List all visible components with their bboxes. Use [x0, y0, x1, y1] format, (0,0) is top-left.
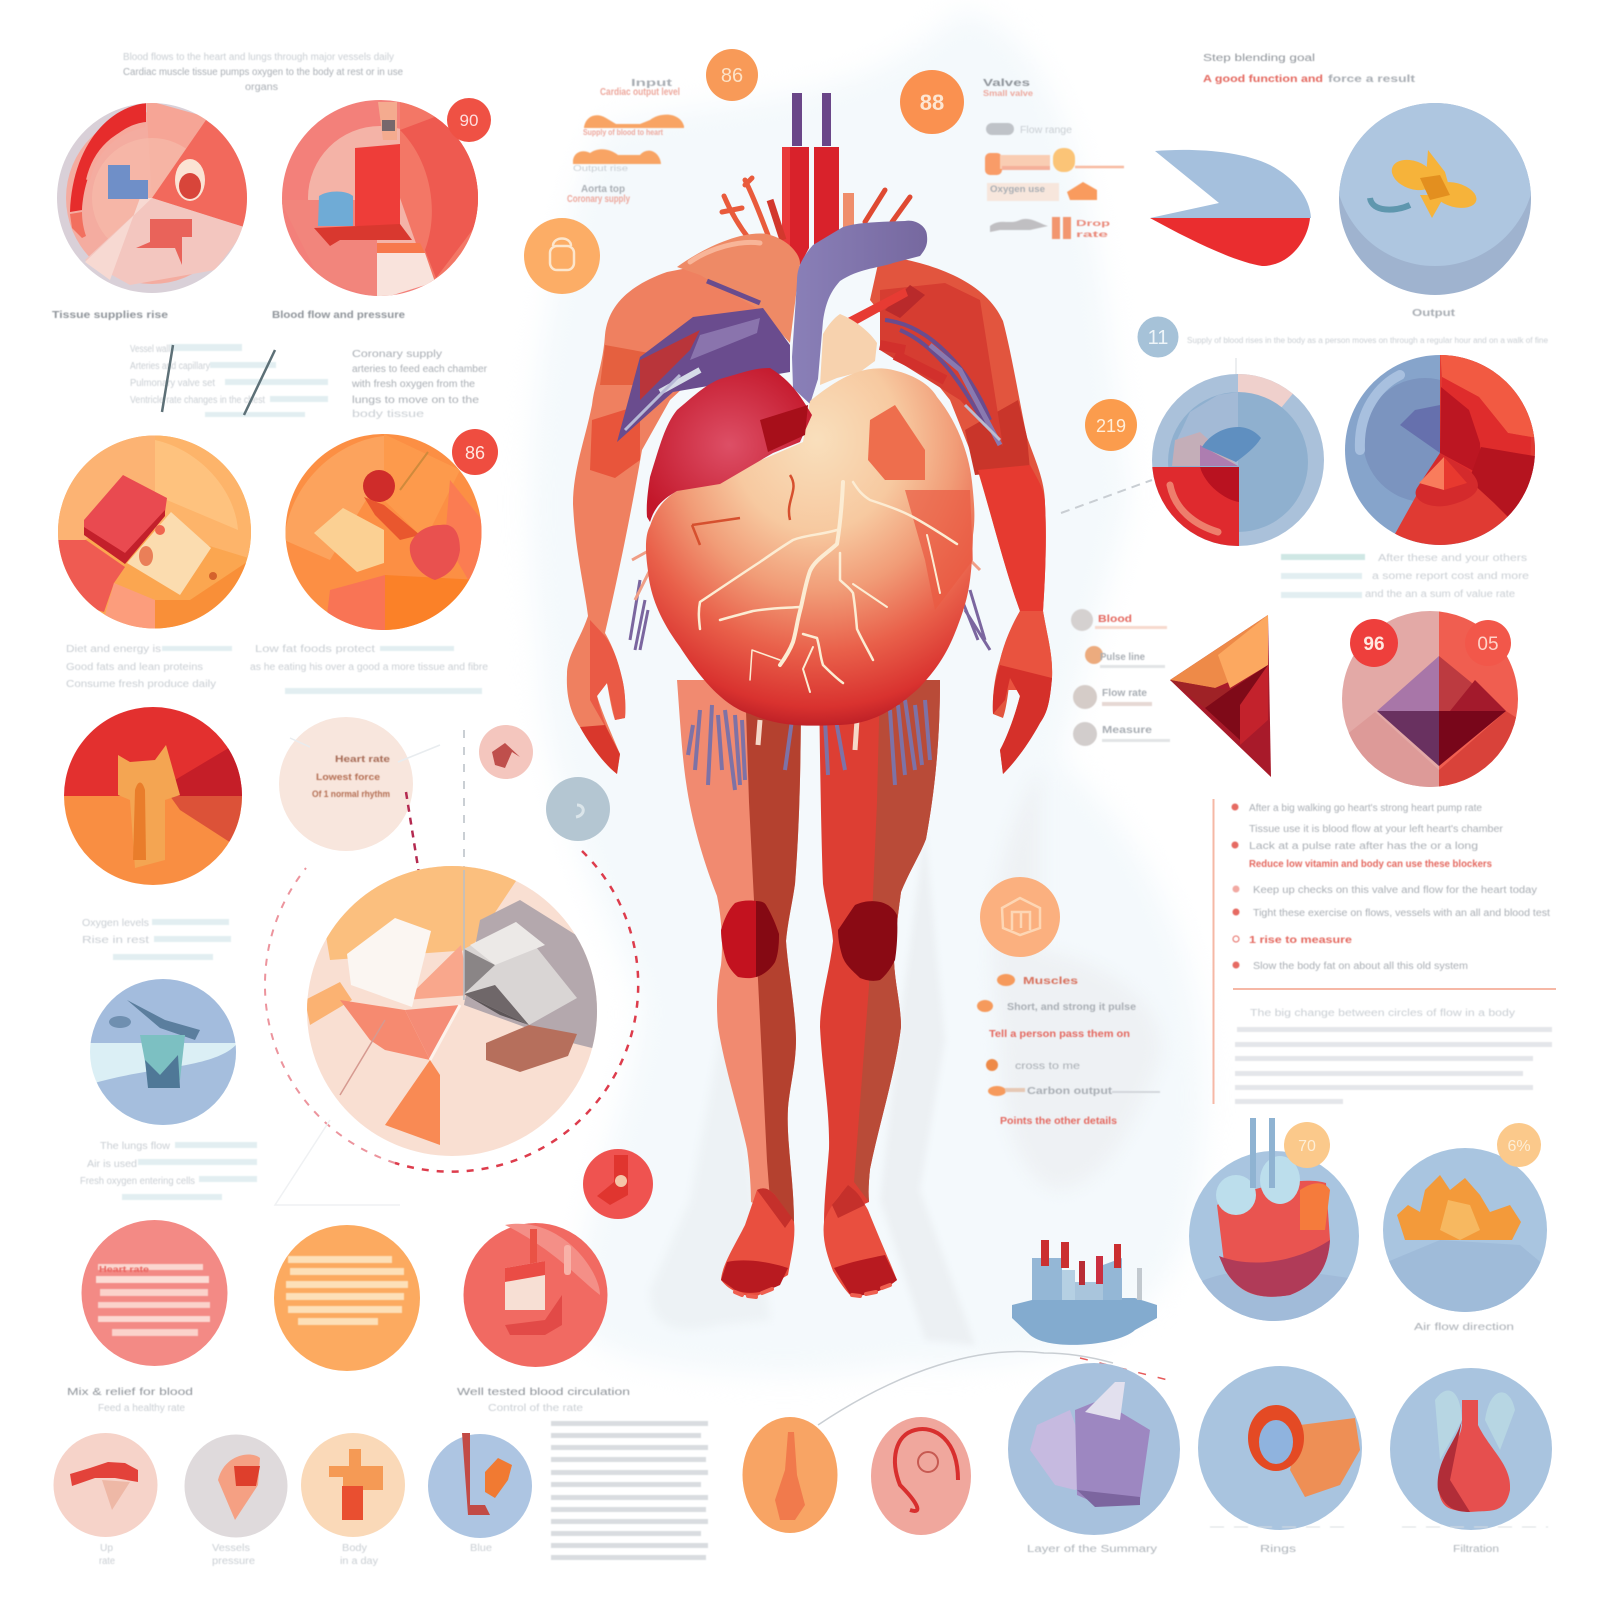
panel: right text notes: After a big walking go heart's strong heart pump rate: [1249, 803, 1482, 814]
neck vessels: [722, 93, 910, 265]
badge: blue 11: [1138, 316, 1178, 358]
text block right of lines: arteries to feed each chamber: [352, 364, 488, 375]
left intro text: Blood flows to the heart and lungs through major vessels daily: [123, 52, 394, 63]
panel: blue circle with flame: [1380, 1123, 1550, 1315]
panel: box icon: [55, 430, 255, 635]
panel: pie icon one: [57, 103, 247, 293]
legs: [677, 680, 940, 1297]
rock: grey: [464, 922, 577, 1025]
captions below icon row: Up: [100, 1543, 113, 1554]
icon: figure: [378, 102, 397, 140]
captions lower left: Control of the rate: [488, 1403, 584, 1414]
panel: right text notes: Tissue use it is blood flow at your left heart's chamber: [1249, 824, 1504, 835]
captions bottom right: [1027, 1527, 1548, 1555]
panel: pink text circle: Heart rate: [99, 1265, 150, 1274]
title top right: Step blending goal: [1203, 53, 1315, 64]
label cluster right of top: [983, 78, 1124, 239]
badge: top center: [706, 49, 758, 101]
text block with slanted lines: Ventricle rate changes in the chest: [130, 395, 265, 406]
panel: note circle: Heart rate: [335, 754, 390, 764]
text block right of lines: Coronary supply: [352, 349, 442, 360]
caption above blue circle: [82, 918, 231, 960]
text block with slanted lines: [130, 344, 328, 417]
caption above blue circle: Rise in rest: [82, 935, 149, 946]
captions below icon row: in a day: [340, 1556, 378, 1567]
label cluster top center: Aorta top: [581, 184, 625, 195]
rock: brown: [486, 1025, 577, 1072]
label cluster right of top: rate: [1076, 230, 1109, 239]
legend list: Blood: [1098, 614, 1132, 625]
captions below icon row: rate: [99, 1556, 115, 1567]
text block with slanted lines: Arteries and capillary: [130, 361, 210, 372]
captions lower left: Mix & relief for blood: [67, 1387, 193, 1398]
chart: diamond circle: [1340, 610, 1524, 790]
vessel fringes beside heart: [630, 580, 990, 650]
text under pies: a some report cost and more: [1372, 571, 1530, 582]
vessel fringes under heart: [688, 700, 930, 790]
label: flower caption: Output: [1412, 308, 1456, 319]
diamond: [1377, 656, 1506, 766]
icon: cherry: [363, 452, 428, 540]
caption texts under food icons: Consume fresh produce daily: [66, 679, 216, 690]
coronary vessels: [699, 482, 957, 692]
text block with slanted lines: Vessel wall: [130, 344, 170, 355]
cream upper chamber: [820, 314, 877, 385]
heart ventricles: [646, 368, 974, 726]
left vessels: [617, 281, 790, 442]
captions bottom right: Filtration: [1453, 1544, 1499, 1555]
label: panel captions top: Blood flow and pressure: [272, 310, 405, 321]
badge: 90: 90: [460, 111, 478, 130]
caption texts under food icons: Good fats and lean proteins: [66, 662, 203, 673]
label cluster top center: Supply of blood to heart: [583, 128, 663, 137]
panel: note circle: [279, 717, 440, 851]
chart: pacman shape: [1150, 150, 1311, 266]
badge: 86: 96: [1363, 634, 1385, 655]
caption below blue circle: Fresh oxygen entering cells: [80, 1176, 195, 1187]
chart: triangle gem: [1170, 615, 1271, 777]
chart: blue red pie large: [1340, 350, 1540, 550]
icon: statue: [118, 745, 180, 868]
captions bottom right: Layer of the Summary: [1027, 1544, 1157, 1555]
purple vena cava: [792, 221, 927, 404]
badge: 70: [1298, 1138, 1316, 1155]
legend list: Pulse line: [1100, 652, 1145, 663]
captions lower left: Well tested blood circulation: [457, 1387, 630, 1398]
right vessels: [840, 283, 1003, 446]
label: panel captions top: [52, 310, 405, 321]
list under house badge: Carbon output: [1027, 1086, 1113, 1097]
panel: large tissue circle: [265, 851, 638, 1172]
icon: small red valve: [583, 1149, 653, 1219]
captions below icon row: pressure: [212, 1556, 255, 1567]
label cluster top center: Coronary supply: [567, 194, 630, 205]
panel: right text notes: Tight these exercise on flows, vessels with an all and blood test: [1253, 908, 1550, 919]
badge: [1284, 1122, 1330, 1168]
foot left: [721, 1188, 794, 1297]
figure: human body with heart: [567, 93, 1052, 1297]
badge: 05: 05: [1477, 634, 1499, 655]
list under house badge: Muscles: [1023, 976, 1079, 987]
icon: cup: [1217, 1181, 1330, 1297]
badge: 05: [1465, 620, 1511, 666]
icon: red box: [84, 475, 167, 558]
badge: top right of figure: 88: [920, 90, 944, 115]
heart patches: [868, 405, 973, 610]
badge: 88: [452, 429, 498, 475]
icon: blue grey badge: [546, 777, 610, 841]
text block lower middle: [551, 1421, 708, 1560]
list under house badge: cross to me: [1015, 1061, 1081, 1072]
label cluster right of top: Flow range: [1020, 125, 1072, 136]
badge: 90: [447, 98, 491, 142]
panel: bottle circle: [1390, 1368, 1552, 1530]
list under house badge: Points the other details: [1000, 1116, 1117, 1127]
panel: blue circle with cup: [1185, 1118, 1365, 1325]
captions below icon row: Vessels: [212, 1543, 250, 1554]
legend list: [1071, 609, 1170, 746]
icon: blue cup: [318, 192, 353, 226]
label cluster top center: [567, 78, 684, 205]
panel: note circle: Of 1 normal rhythm: [312, 789, 390, 799]
badge: 88: 86: [465, 443, 485, 463]
label cluster right of top: Small valve: [983, 89, 1034, 98]
icon row: bottom peach: [301, 1433, 405, 1537]
panel: note circle: Lowest force: [316, 772, 380, 782]
icon: blue ship: [1012, 1240, 1157, 1345]
label: flame caption: Air flow direction: [1414, 1322, 1514, 1333]
icon row: bottom grey: [184, 1434, 288, 1538]
text block right of lines: lungs to move on to the: [352, 395, 480, 406]
captions lower left: Feed a healthy rate: [98, 1403, 185, 1414]
dashed connector: [406, 792, 421, 886]
label cluster top center: Output rise: [573, 164, 629, 173]
chart: blue red pie: [1150, 358, 1330, 550]
badge: 86: [1350, 619, 1398, 667]
title top right: force a result: [1328, 74, 1416, 85]
captions below icon row: Body: [342, 1543, 367, 1554]
label cluster right of top: Valves: [983, 78, 1031, 89]
badge: orange 219: [1085, 399, 1137, 451]
panel: blue flower circle: [1339, 103, 1531, 295]
dashed connector: [1061, 480, 1152, 513]
caption above blue circle: Oxygen levels: [82, 918, 149, 929]
label cluster top center: Input: [631, 78, 673, 89]
icon: cream package: [127, 512, 211, 595]
list under house badge: Tell a person pass them on: [989, 1029, 1130, 1040]
panel: right text notes: The big change between circles of flow in a body: [1250, 1008, 1515, 1019]
icon row: bottom pink: [54, 1433, 158, 1537]
aorta arch: [677, 233, 800, 343]
icon: cream block: [314, 508, 384, 572]
panel: red tool circle: [464, 1223, 608, 1367]
list under house badge: Short, and strong it pulse: [1007, 1002, 1136, 1013]
captions below icon row: Blue: [470, 1543, 492, 1554]
panel: pink text circle: [82, 1220, 228, 1366]
icon: red blob: [410, 525, 460, 580]
connector lines faint: [275, 1120, 400, 1205]
torso and shoulders: [567, 250, 1052, 774]
vertical dashed guide: [463, 730, 465, 900]
badge: top right of figure: [900, 70, 964, 134]
knee left: [721, 901, 779, 978]
caption below blue circle: Air is used: [87, 1159, 137, 1170]
text block with slanted lines: Pulmonary valve set: [130, 378, 215, 389]
icon: red stand: [136, 219, 192, 265]
text block right of lines: body tissue: [352, 409, 425, 420]
panel: right text notes: Slow the body fat on about all this old system: [1253, 961, 1468, 972]
panel: statue icon: [60, 705, 250, 888]
panel: right text notes: Lack at a pulse rate after has the or a long: [1249, 841, 1478, 852]
icon: ice and pins: [1216, 1118, 1300, 1215]
icon row: bottom blue: [428, 1433, 532, 1538]
label cluster right of top: Drop: [1076, 219, 1110, 228]
panel: blue lung icon: [88, 975, 240, 1130]
badge: lock: [524, 218, 600, 294]
captions bottom right: Rings: [1260, 1544, 1296, 1555]
captions below icon row: [99, 1543, 492, 1567]
panel: ring circle: [1198, 1366, 1362, 1530]
badge: top center: 86: [721, 65, 743, 87]
label: panel captions top: Tissue supplies rise: [52, 310, 169, 321]
label cluster right of top: Oxygen use: [990, 184, 1045, 194]
background silhouette: [531, 10, 1205, 1375]
badge: orange house: [980, 877, 1060, 957]
list under house badge: [977, 974, 1160, 1127]
panel: right text notes: Reduce low vitamin and body can use these blockers: [1249, 859, 1492, 870]
panel: orange ellipse: [742, 1417, 838, 1533]
knee right: [838, 901, 897, 981]
caption below blue circle: The lungs flow: [100, 1141, 171, 1152]
panel: right text notes: [1214, 799, 1556, 1104]
text under pies: After these and your others: [1378, 553, 1527, 564]
panel: right text notes: Keep up checks on this valve and flow for the heart today: [1253, 885, 1537, 896]
caption texts under food icons: [66, 644, 488, 694]
icon: flower: [1370, 150, 1479, 218]
caption texts under food icons: as he eating his over a good a more tissue and fibre: [250, 662, 488, 673]
title top right: [1203, 53, 1416, 85]
icon: red cabinet: [355, 144, 400, 226]
panel: purple crystal circle: [1008, 1363, 1180, 1535]
icon: small pink tissue: [479, 725, 533, 779]
icon: blue blocks: [108, 165, 148, 199]
legend list: Flow rate: [1102, 688, 1147, 699]
arc connector: [818, 1352, 1113, 1425]
icon: flame: [1397, 1175, 1521, 1240]
badge: 6%: [1507, 1138, 1531, 1155]
text block right of lines: [351, 349, 488, 420]
left intro text: organs: [245, 82, 278, 93]
foot right: [824, 1185, 897, 1296]
panel: right text notes: 1 rise to measure: [1249, 935, 1353, 946]
red atrium: [647, 368, 812, 522]
panel: orange text circle: [274, 1225, 420, 1371]
text line after badge: Supply of blood rises in the body as a person moves on through a regular hour and on a walk of fine: [1187, 336, 1549, 345]
title top right: A good function and: [1203, 74, 1323, 85]
text under pies: and the an a sum of value rate: [1365, 589, 1515, 600]
left intro text: Cardiac muscle tissue pumps oxygen to the body at rest or in use: [123, 67, 403, 78]
text block right of lines: with fresh oxygen from the: [351, 379, 475, 390]
legend list: Measure: [1102, 725, 1153, 736]
panel: cherry icon: [280, 429, 498, 635]
caption texts under food icons: Diet and energy is: [66, 644, 161, 655]
icon: base: [314, 224, 412, 246]
left intro text: [123, 52, 403, 93]
panel: device icon: [280, 98, 491, 300]
label cluster top center: Cardiac output level: [600, 87, 680, 98]
badge: blue 11: 11: [1148, 327, 1168, 349]
text under pies: [1281, 553, 1530, 600]
badge: orange 219: 219: [1096, 416, 1126, 436]
panel: pink ellipse: [871, 1417, 971, 1535]
icon: small heart: [175, 159, 205, 201]
rock: white: [347, 918, 431, 1007]
caption below blue circle: [80, 1141, 257, 1200]
captions lower left: [67, 1387, 630, 1414]
badge: [1497, 1123, 1541, 1167]
caption texts under food icons: Low fat foods protect: [255, 644, 375, 655]
